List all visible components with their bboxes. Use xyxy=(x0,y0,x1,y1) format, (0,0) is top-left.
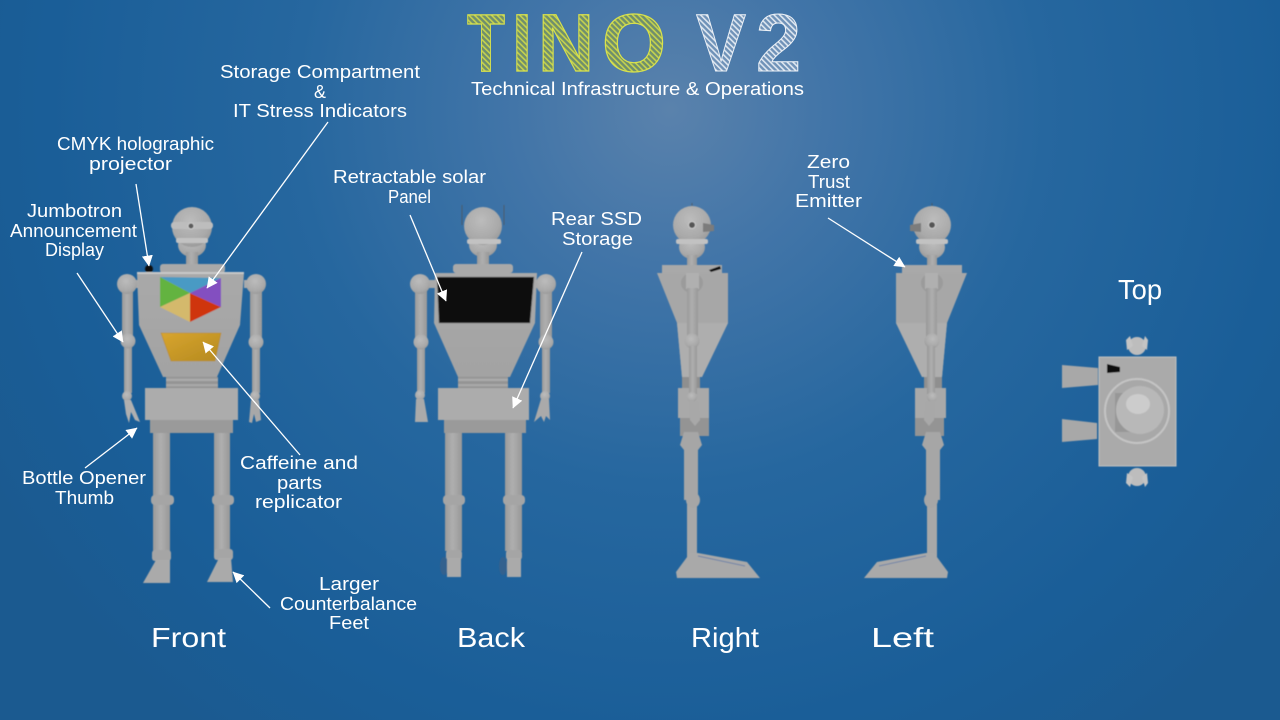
title word: TINO: T xyxy=(467,0,505,89)
callout: zero trust emitter: Trust xyxy=(808,172,850,192)
callout: caffeine replicator: parts xyxy=(277,473,322,493)
callout: jumbotron display: Announcement xyxy=(10,221,137,241)
callout: bottle opener xyxy=(22,428,146,508)
callout: storage compartment xyxy=(207,62,420,288)
callout: jumbotron display xyxy=(10,201,137,342)
callout: caffeine replicator xyxy=(203,342,358,512)
callout: solar panel: Panel xyxy=(388,187,431,207)
robot: right view xyxy=(657,203,760,578)
icon: holographic projector xyxy=(145,265,153,273)
callout: counterbalance feet xyxy=(233,572,417,633)
title word: TINO: O xyxy=(602,0,666,89)
label: left: Left xyxy=(871,622,934,653)
caffeine replicator window xyxy=(161,333,221,361)
label: top: Top xyxy=(1118,274,1162,305)
callout: storage compartment: Storage Compartment xyxy=(220,62,420,82)
callout: zero trust emitter xyxy=(795,152,905,267)
title xyxy=(467,0,666,89)
callout: rear SSD xyxy=(513,209,642,408)
callout: counterbalance feet: Counterbalance xyxy=(280,594,417,614)
callout: holographic projector: CMYK holographic xyxy=(57,134,214,154)
label: back: Back xyxy=(457,622,526,653)
title word: TINO: N xyxy=(538,0,594,89)
callout: storage compartment: IT Stress Indicators xyxy=(233,101,407,121)
callout: zero trust emitter: Zero xyxy=(807,152,850,172)
callout: holographic projector xyxy=(57,134,214,266)
robot: back view xyxy=(410,205,556,577)
callout: solar panel: Retractable solar xyxy=(333,167,486,187)
solar panel xyxy=(437,277,534,323)
callout: jumbotron display: Jumbotron xyxy=(27,201,122,221)
callout: rear SSD: Rear SSD xyxy=(551,209,642,229)
callout: zero trust emitter: Emitter xyxy=(795,191,862,211)
callout: caffeine replicator: Caffeine and xyxy=(240,453,358,473)
robot: top view xyxy=(1062,336,1176,487)
robot: left view xyxy=(864,203,967,578)
arms xyxy=(122,290,133,338)
callout: jumbotron display: Display xyxy=(45,240,104,260)
callout: counterbalance feet: Larger xyxy=(319,574,379,594)
subtitle: Technical Infrastructure & Operations xyxy=(471,79,804,99)
legs xyxy=(153,433,170,551)
callout: caffeine replicator: replicator xyxy=(255,492,342,512)
label: right: Right xyxy=(691,622,759,653)
robot: front view xyxy=(117,207,266,583)
title word: TINO: I xyxy=(512,0,532,89)
view labels xyxy=(151,274,1162,653)
title word: V2: V xyxy=(696,0,746,89)
callout: solar panel xyxy=(333,167,486,301)
title word: V2: 2 xyxy=(756,0,801,89)
label: front: Front xyxy=(151,622,226,653)
callout: bottle opener: Bottle Opener xyxy=(22,468,146,488)
callout: storage compartment: & xyxy=(314,82,326,102)
callout: holographic projector: projector xyxy=(89,154,172,174)
callout: rear SSD: Storage xyxy=(562,229,633,249)
chest: CMYK indicators xyxy=(160,277,221,322)
callout: counterbalance feet: Feet xyxy=(329,613,369,633)
callout: bottle opener: Thumb xyxy=(55,488,114,508)
